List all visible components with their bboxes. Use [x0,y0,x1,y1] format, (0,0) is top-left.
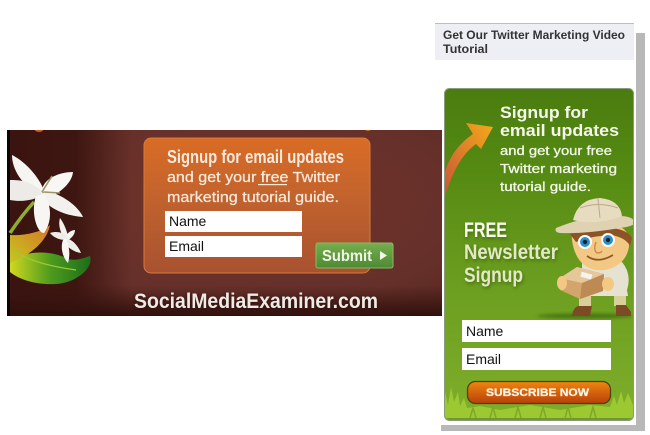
heading bar: twitter marketing video tutorial [435,23,634,60]
decoration: grass [445,387,633,420]
input: email: Email [466,351,501,367]
icon: white lily flowers and leaves [10,155,91,284]
heading: free newsletter signup: Newsletter [465,243,559,266]
text: guide offer: marketing tutorial guide. [167,189,339,206]
heading: free newsletter signup: Newsletter [464,241,558,264]
text: SocialMediaExaminer.com: SocialMediaExaminer.com [134,290,378,313]
input: email: Email [169,238,204,254]
input: email [165,236,302,257]
button: subscribe now [468,382,610,404]
heading: signup for email updates: Signup for email updates [167,147,344,167]
icon: explorer character with box [537,198,635,318]
panel: orange signup form [144,138,370,273]
heading: signup for email updates: email updates [500,121,619,140]
button: subscribe now: SUBSCRIBE NOW [486,387,590,399]
text: guide offer: and get your free [500,143,612,158]
heading bar: twitter marketing video tutorial: Get Our Twitter Marketing Video [443,30,625,42]
heading: free newsletter signup: Signup [464,264,523,287]
heading: free newsletter signup [464,219,559,289]
text: guide offer: and get your free Twitter [167,169,340,186]
text: guide offer: tutorial guide. [500,179,591,194]
button: submit [316,243,393,268]
input: name [462,320,611,342]
panel: sidebar widget [435,23,635,425]
heading: free newsletter signup: FREE [464,219,507,242]
heading: free newsletter signup: Signup [465,266,524,289]
input: email [462,348,611,370]
input: name: Name [169,213,207,229]
button: submit: Submit [322,248,372,265]
input: name [165,211,302,232]
icon: orange curved arrow [445,123,493,197]
heading: free newsletter signup: FREE [465,221,508,244]
text: SocialMediaExaminer.com [134,292,378,310]
panel: brown signup banner [7,120,442,316]
panel: green newsletter box [444,88,635,420]
text: guide offer: Twitter marketing [500,161,617,176]
heading bar: twitter marketing video tutorial: Tutorial [443,44,488,56]
panel: sidebar shadow [441,33,645,431]
text: SocialMediaExaminer.com: SocialMediaExaminer.com [134,291,378,314]
heading: signup for email updates: Signup for [500,103,588,122]
input: name: Name [466,323,504,339]
